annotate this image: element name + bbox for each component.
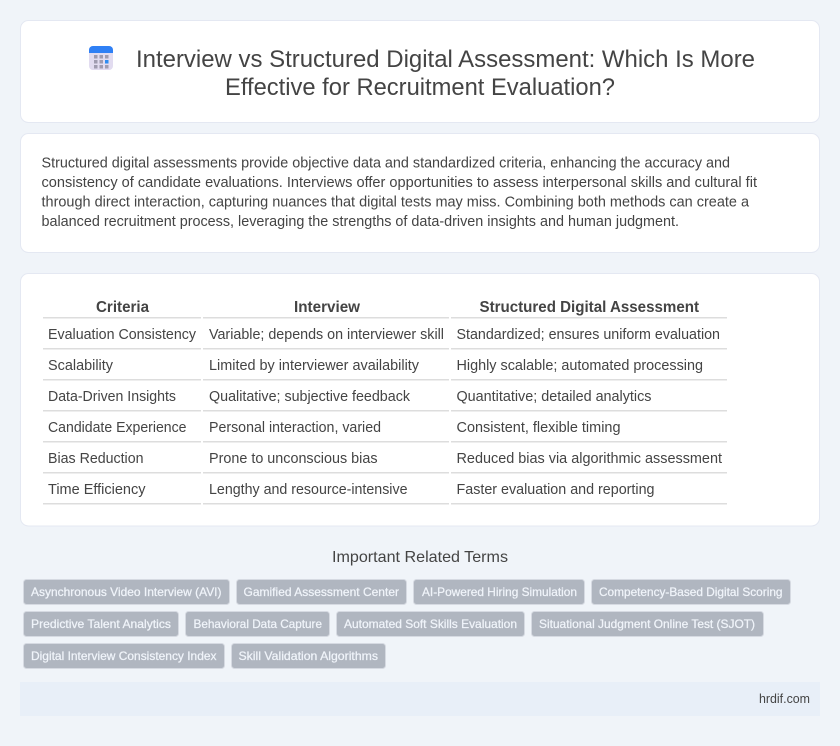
title (136, 46, 755, 101)
tag: Automated Soft Skills Evaluation: Automated Soft Skills Evaluation (344, 617, 517, 631)
text block: introduction paragraph: Structured digital assessments provide objective data and standardized criteria, enhancing the accuracy and (42, 156, 730, 172)
tag: Situational Judgment Online Test (532, 612, 764, 636)
tag: Skill Validation Algorithms (232, 644, 386, 668)
title: Effective for Recruitment Evaluation? (225, 74, 615, 101)
table row: Candidate Experience: Consistent, flexible timing (456, 420, 620, 436)
table row: Evaluation Consistency: Standardized; ensures uniform evaluation (456, 327, 720, 343)
panel: introduction (20, 134, 820, 252)
table row: Evaluation Consistency: Evaluation Consistency (48, 327, 197, 343)
tag: Skill Validation Algorithms: Skill Validation Algorithms (238, 649, 378, 663)
table row: Time Efficiency (43, 482, 727, 504)
table row: Candidate Experience (43, 420, 727, 442)
tag: Competency-Based Digital Scoring (592, 580, 790, 604)
footer source label: hrdif.com (759, 691, 810, 706)
table row: Candidate Experience: Candidate Experience (48, 420, 186, 436)
tag: Gamified Assessment Center: Gamified Assessment Center (244, 585, 399, 599)
table row: Data-Driven Insights: Qualitative; subjective feedback (209, 389, 411, 405)
panel: comparison table (20, 274, 820, 526)
tag: Asynchronous Video Interview (24, 580, 230, 604)
table row: Candidate Experience: Personal interaction, varied (209, 420, 381, 436)
text block: introduction paragraph: consistency of candidate evaluations. Interviews offer opportunities to assess interpersonal skills and cultural fit (42, 175, 757, 191)
tag: Predictive Talent Analytics (24, 612, 178, 636)
text block: introduction paragraph: through direct interaction, capturing nuances that digital tests may miss. Combining both methods can create a (42, 194, 749, 210)
text block: introduction paragraph (42, 156, 757, 230)
tag: Gamified Assessment Center (236, 580, 406, 604)
table row: Data-Driven Insights: Data-Driven Insights (48, 389, 176, 405)
tag: Predictive Talent Analytics: Predictive Talent Analytics (31, 617, 171, 631)
footer bar (20, 682, 820, 716)
tag: AI-Powered Hiring Simulation: AI-Powered Hiring Simulation (422, 585, 577, 599)
table row: Scalability: Limited by interviewer availability (209, 358, 420, 374)
table row: Bias Reduction: Bias Reduction (48, 451, 144, 467)
table row: Scalability: Scalability (48, 358, 114, 374)
table row: Data-Driven Insights (43, 389, 727, 412)
table row: Scalability: Highly scalable; automated processing (456, 358, 703, 374)
table row: Evaluation Consistency (43, 327, 727, 350)
text block: introduction paragraph: balanced recruitment process, leveraging the strengths of data-driven insights and human judgment. (42, 214, 679, 230)
table header row: Criteria (96, 299, 149, 316)
icon: calendar (89, 46, 113, 70)
panel: header card (20, 20, 820, 122)
table row: Evaluation Consistency: Variable; depends on interviewer skill (209, 327, 444, 343)
tag: Behavioral Data Capture: Behavioral Data Capture (194, 617, 322, 631)
tag: Digital Interview Consistency Index: Digital Interview Consistency Index (31, 649, 216, 663)
table header row: Interview (294, 299, 361, 316)
table row: Time Efficiency: Time Efficiency (48, 482, 146, 498)
table row: Bias Reduction (43, 451, 727, 474)
tag: Behavioral Data Capture (186, 612, 330, 636)
table row: Time Efficiency: Lengthy and resource-intensive (209, 482, 408, 498)
tag: Competency-Based Digital Scoring: Competency-Based Digital Scoring (599, 585, 782, 599)
tag: Asynchronous Video Interview: Asynchronous Video Interview (AVI) (31, 585, 222, 599)
table row: Bias Reduction: Reduced bias via algorithmic assessment (456, 451, 722, 467)
tag: AI-Powered Hiring Simulation (414, 580, 584, 604)
table header row: Structured Digital Assessment (480, 299, 700, 316)
heading: Important Related Terms: Important Related Terms (332, 549, 508, 566)
panel: related term tags (24, 580, 790, 668)
table header row (43, 299, 727, 318)
tag: Digital Interview Consistency Index (24, 644, 224, 668)
table row: Scalability (43, 358, 727, 380)
table row: Data-Driven Insights: Quantitative; detailed analytics (456, 389, 652, 405)
table row: Bias Reduction: Prone to unconscious bias (209, 451, 378, 467)
tag: Situational Judgment Online Test: Situational Judgment Online Test (SJOT) (539, 617, 755, 631)
tag: Automated Soft Skills Evaluation (336, 612, 524, 636)
title: Interview vs Structured Digital Assessment: Which Is More (136, 46, 755, 73)
table row: Time Efficiency: Faster evaluation and reporting (456, 482, 654, 498)
